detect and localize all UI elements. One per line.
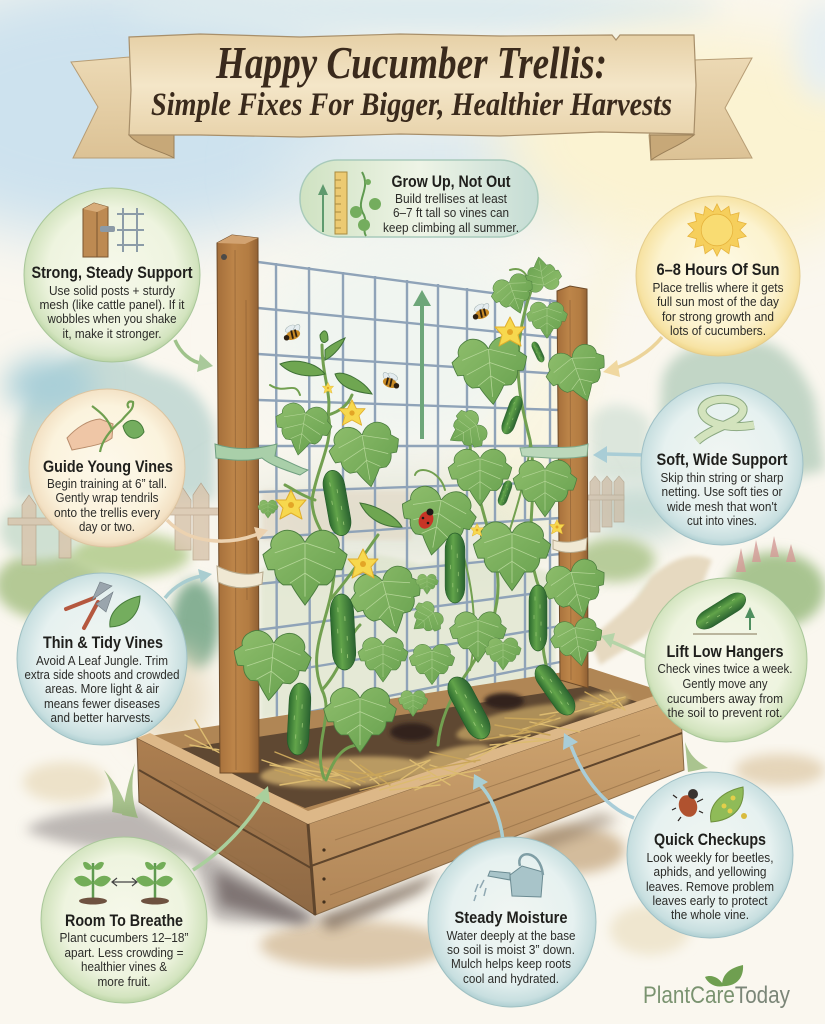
heading: Soft, Wide Support <box>656 451 788 469</box>
left foliage <box>0 550 105 620</box>
heading: Steady Moisture <box>454 909 568 927</box>
body: Gently wrap tendrils <box>56 491 158 505</box>
picket fence right <box>588 476 624 532</box>
heading: Lift Low Hangers <box>666 643 784 661</box>
icon: watering can <box>474 854 543 901</box>
body: keep climbing all summer. <box>383 221 519 235</box>
body: the whole vine. <box>671 908 749 922</box>
straw mulch <box>185 690 625 790</box>
grey-green bush right <box>660 341 825 480</box>
body: Build trellises at least <box>395 192 507 206</box>
arrow: guide vines <box>167 520 268 541</box>
cream tie right <box>553 538 587 552</box>
body: Mulch helps keep roots <box>451 957 571 971</box>
green tie right <box>520 444 588 458</box>
panel: thin and tidy <box>17 573 187 745</box>
body: 6–7 ft tall so vines can <box>393 206 509 220</box>
panel: guide young vines <box>29 389 185 547</box>
ladybug <box>416 508 436 531</box>
heading: Room To Breathe <box>65 912 183 930</box>
body: Use solid posts + sturdy <box>49 284 176 298</box>
heading: Guide Young Vines <box>43 458 173 476</box>
ribbon folds <box>129 135 694 160</box>
body: cool and hydrated. <box>463 972 559 986</box>
body: for strong growth and <box>662 310 774 324</box>
panel: strong support <box>24 188 200 362</box>
bed front face <box>308 697 684 915</box>
body: wobbles when you shake <box>47 312 177 326</box>
body: areas. More light & air <box>45 682 159 696</box>
arrow: soft support <box>593 446 646 463</box>
panel: quick checkups <box>627 772 793 938</box>
heading: 6–8 Hours Of Sun <box>656 261 780 279</box>
panel: sun <box>636 196 800 356</box>
arrow: lift hangers <box>601 633 646 657</box>
grass tufts <box>104 742 708 818</box>
flowers <box>276 317 564 578</box>
logo wordmark: PlantCareToday <box>643 982 790 1009</box>
icon: pruners and leaf <box>66 582 140 628</box>
icon: post and mesh <box>83 203 144 257</box>
banner body <box>129 34 696 137</box>
icon: soft ribbon <box>697 399 754 441</box>
left post <box>217 235 259 773</box>
heading: Strong, Steady Support <box>32 264 193 282</box>
icon: hand and vine <box>67 402 144 452</box>
body: Place trellis where it gets <box>652 281 784 295</box>
cucumber leaves <box>230 254 616 752</box>
body: apart. Less crowding = <box>64 946 184 960</box>
body: Gently move any <box>682 677 768 691</box>
body: onto the trellis every <box>54 506 161 520</box>
body: full sun most of the day <box>657 295 780 309</box>
icon: sun <box>688 204 746 256</box>
body: leaves early to protect <box>652 894 768 908</box>
body: day or two. <box>79 520 135 534</box>
bed left face <box>137 738 315 915</box>
panel: grow up <box>300 160 538 237</box>
arrow: quick checkups <box>563 733 634 818</box>
left ribbon tail <box>71 57 174 158</box>
body: lots of cucumbers. <box>670 324 766 338</box>
body: the soil to prevent rot. <box>668 706 782 720</box>
body: leaves. Remove problem <box>646 880 774 894</box>
logo leaves <box>705 965 743 987</box>
body: Check vines twice a week. <box>658 662 792 676</box>
icon: ruler vine arrow <box>318 172 381 236</box>
body: Skip thin string or sharp <box>660 471 784 485</box>
bees <box>284 302 490 390</box>
icon: beetle and leaf <box>672 787 747 822</box>
body: Water deeply at the base <box>446 929 576 943</box>
green height arrow <box>413 290 431 439</box>
body: Look weekly for beetles, <box>646 851 774 865</box>
picket fence left <box>8 483 220 565</box>
body: and better harvests. <box>50 711 154 725</box>
trellis wire mesh <box>258 262 560 765</box>
logo: PlantCareToday <box>643 965 790 1009</box>
pink garden flowers <box>736 536 796 572</box>
vines <box>270 269 558 780</box>
ground washes <box>130 650 210 750</box>
body: so soil is moist 3” down. <box>447 943 575 957</box>
right ribbon tail <box>649 58 752 160</box>
sun rays <box>440 210 640 560</box>
heading: Quick Checkups <box>654 831 766 849</box>
body: more fruit. <box>98 975 150 989</box>
green tie left <box>215 444 308 475</box>
icon: cucumber and arrow <box>692 589 757 634</box>
arrow: room to breathe <box>193 786 270 870</box>
body: Avoid A Leaf Jungle. Trim <box>36 654 168 668</box>
title banner <box>71 34 752 160</box>
body: it, make it stronger. <box>62 327 162 341</box>
panel: soft wide support <box>641 383 803 545</box>
arrow: strong support <box>175 340 213 372</box>
cucumbers <box>286 341 580 756</box>
body: means fewer diseases <box>44 697 160 711</box>
bed interior soil <box>137 668 680 822</box>
panel: lift low hangers <box>645 578 807 742</box>
banner subheading: Simple Fixes For Bigger, Healthier Harvests <box>151 87 672 123</box>
body: wide mesh that won't <box>666 500 777 514</box>
body: healthier vines & <box>81 960 168 974</box>
body: cut into vines. <box>687 514 757 528</box>
fence and garden seen through the trellis <box>260 490 556 720</box>
blue-green bush left <box>14 351 215 500</box>
panel: room to breathe <box>41 837 207 1003</box>
body: Plant cucumbers 12–18” <box>60 931 188 945</box>
banner heading: Happy Cucumber Trellis: <box>215 37 607 88</box>
cream tie left <box>217 566 263 588</box>
body: Begin training at 6” tall. <box>47 477 167 491</box>
body: extra side shoots and crowded <box>24 668 180 682</box>
right foliage and path <box>575 538 655 582</box>
icon: seedlings <box>74 862 173 904</box>
body: cucumbers away from <box>667 692 783 706</box>
body: mesh (like cattle panel). If it <box>40 298 185 312</box>
arrow: steady moisture <box>473 774 503 840</box>
arrow: thin vines <box>165 569 212 598</box>
heading: Thin & Tidy Vines <box>43 634 163 652</box>
body: netting. Use soft ties or <box>662 485 782 499</box>
right post <box>557 286 588 688</box>
panel: steady moisture <box>428 837 596 1007</box>
body: aphids, and yellowing <box>654 865 766 879</box>
raised bed <box>137 668 684 915</box>
arrow: sun <box>603 337 662 377</box>
heading: Grow Up, Not Out <box>392 173 511 191</box>
ties <box>215 444 588 588</box>
ground shadow <box>25 805 318 924</box>
